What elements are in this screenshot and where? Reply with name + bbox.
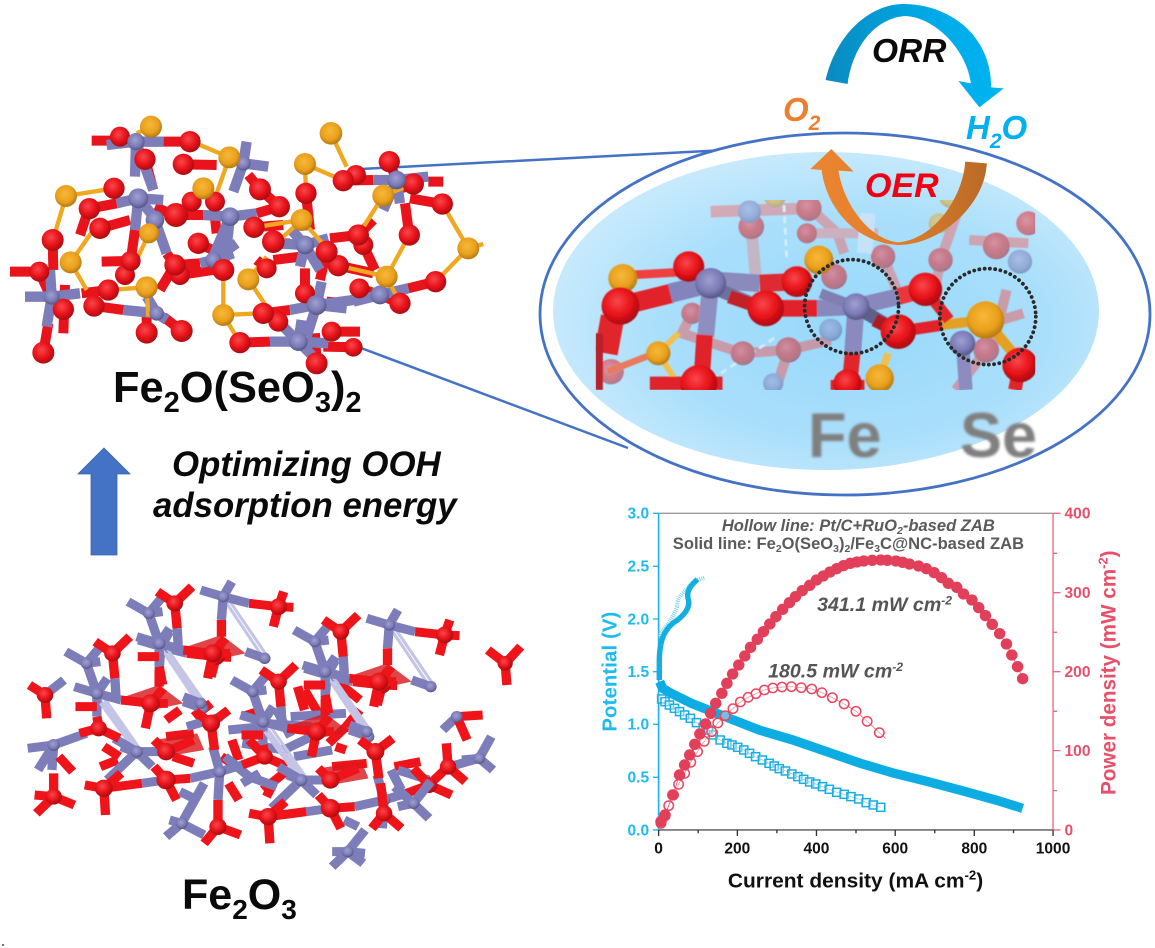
hollow squares: Pt/C+RuO2 discharge [662,699,881,807]
light blue background [553,152,1099,470]
bottom axis numbers: 200 [724,840,750,857]
label: Fe2O(SeO3)2: Fe [113,364,164,412]
arrow: OER [810,149,987,245]
chart: polarization and power density [599,506,1121,892]
bottom axis title: Current density (mA cm [728,869,965,892]
arrow: up from Fe2O3 to Fe2O(SeO3)2 [78,448,130,555]
panel: magnified active-site ellipse [540,133,1150,495]
left axis numbers: 2.5 [628,559,650,576]
magnified atoms [596,200,1036,390]
label: Fe2O(SeO3)2: 2 [345,387,362,419]
label: Fe2O3: 3 [281,894,297,925]
annotation: 341.1 mW cm-2: 341.1 mW cm [817,594,941,616]
solid band: Fe2O(SeO3)2/Fe3C@NC discharge [660,682,1023,808]
legend: hollow line: -based ZAB [903,517,995,535]
bottom axis numbers: 800 [961,840,987,857]
small dot at corner [2,944,4,946]
bottom axis title: -2 [965,867,976,882]
right axis title: Power density (mW cm [1097,569,1121,795]
label: O2: 2 [808,112,821,135]
foreground bonds and atoms [599,246,1038,402]
label: H2O: 2 [989,130,1002,153]
left axis numbers: 1.0 [628,717,649,734]
label: Fe2O(SeO3)2: O(SeO [180,364,315,412]
right axis numbers: 100 [1065,743,1090,760]
label: ORR: ORR [872,33,946,70]
left axis numbers: 3.0 [628,506,649,523]
legend: solid line: ) [839,535,844,553]
label: Fe: Fe [808,401,882,471]
legend: solid line: 2 [844,544,851,555]
legend: solid line: 2 [776,544,782,555]
text: optimizing OOH adsorption energy: adsorption energy [153,486,458,525]
bottom axis numbers [654,840,1070,857]
axes frame [653,513,1060,836]
arrow: ORR [826,4,1004,107]
annotation: 341.1 mW cm-2: -2 [941,593,952,607]
annotation: 180.5 mW cm-2: 180.5 mW cm [768,661,892,683]
dotted circle: Se site [940,269,1036,365]
right axis numbers [1065,506,1090,839]
legend: solid line: Solid line: Fe [673,535,776,553]
ellipse outline [540,133,1150,495]
left axis numbers: 1.5 [628,664,650,681]
hollow circles: Pt/C+RuO2 power density [661,687,886,823]
callout line: upper connector [361,150,726,169]
label: Fe2O3: 2 [232,894,248,925]
legend: solid line: /Fe [850,535,874,553]
callout line: lower connector [361,348,628,448]
legend: hollow line: Hollow line: Pt/C+RuO [722,517,897,535]
label: Fe2O3: O [248,871,281,919]
right axis numbers: 300 [1065,585,1090,602]
label: H2O: H [966,109,990,146]
dotted circle: Fe site [805,260,899,354]
left axis numbers: 0.0 [628,822,649,839]
label: Fe2O3: Fe [182,871,232,919]
bottom axis numbers: 1000 [1036,840,1070,857]
right axis title: ) [1097,550,1121,557]
annotation: 180.5 mW cm-2: -2 [892,660,903,674]
right axis numbers: 400 [1065,506,1090,523]
solid circles: Fe2O(SeO3)2/Fe3C@NC power density [661,560,1023,822]
legend: hollow line: 2 [896,526,903,537]
right axis numbers: 200 [1065,664,1090,681]
label: O2: O [783,91,809,128]
label: Fe2O(SeO3)2: 3 [315,387,331,419]
bottom axis numbers: 400 [803,840,829,857]
legend: solid line: O(SeO [782,535,833,553]
bottom axis numbers: 0 [654,840,663,857]
legend: solid line: 3 [833,544,839,555]
left axis numbers [628,506,650,839]
label: Fe2O(SeO3)2: ) [331,364,345,412]
faded background atoms [602,200,1036,390]
label: OER: OER [865,167,939,205]
molecule: Fe2O3 structure [28,582,521,867]
label: Se: Se [960,401,1037,471]
text: optimizing OOH adsorption energy: Optimizing OOH [172,445,442,484]
left axis numbers: 0.5 [628,770,650,787]
legend: solid line: 3 [874,544,880,555]
left axis title: Potential (V) [599,612,622,732]
molecule: Fe2O(SeO3)2 structure [10,116,483,374]
bottom axis title: ) [976,869,983,892]
left axis numbers: 2.0 [628,611,649,628]
label: H2O: O [1002,109,1028,146]
bottom axis numbers: 600 [882,840,908,857]
legend: solid line: C@NC-based ZAB [880,535,1024,553]
charge curves [659,577,705,680]
label: Fe2O(SeO3)2: 2 [164,387,180,419]
right axis numbers: 0 [1065,822,1073,839]
right axis title: -2 [1095,557,1110,569]
